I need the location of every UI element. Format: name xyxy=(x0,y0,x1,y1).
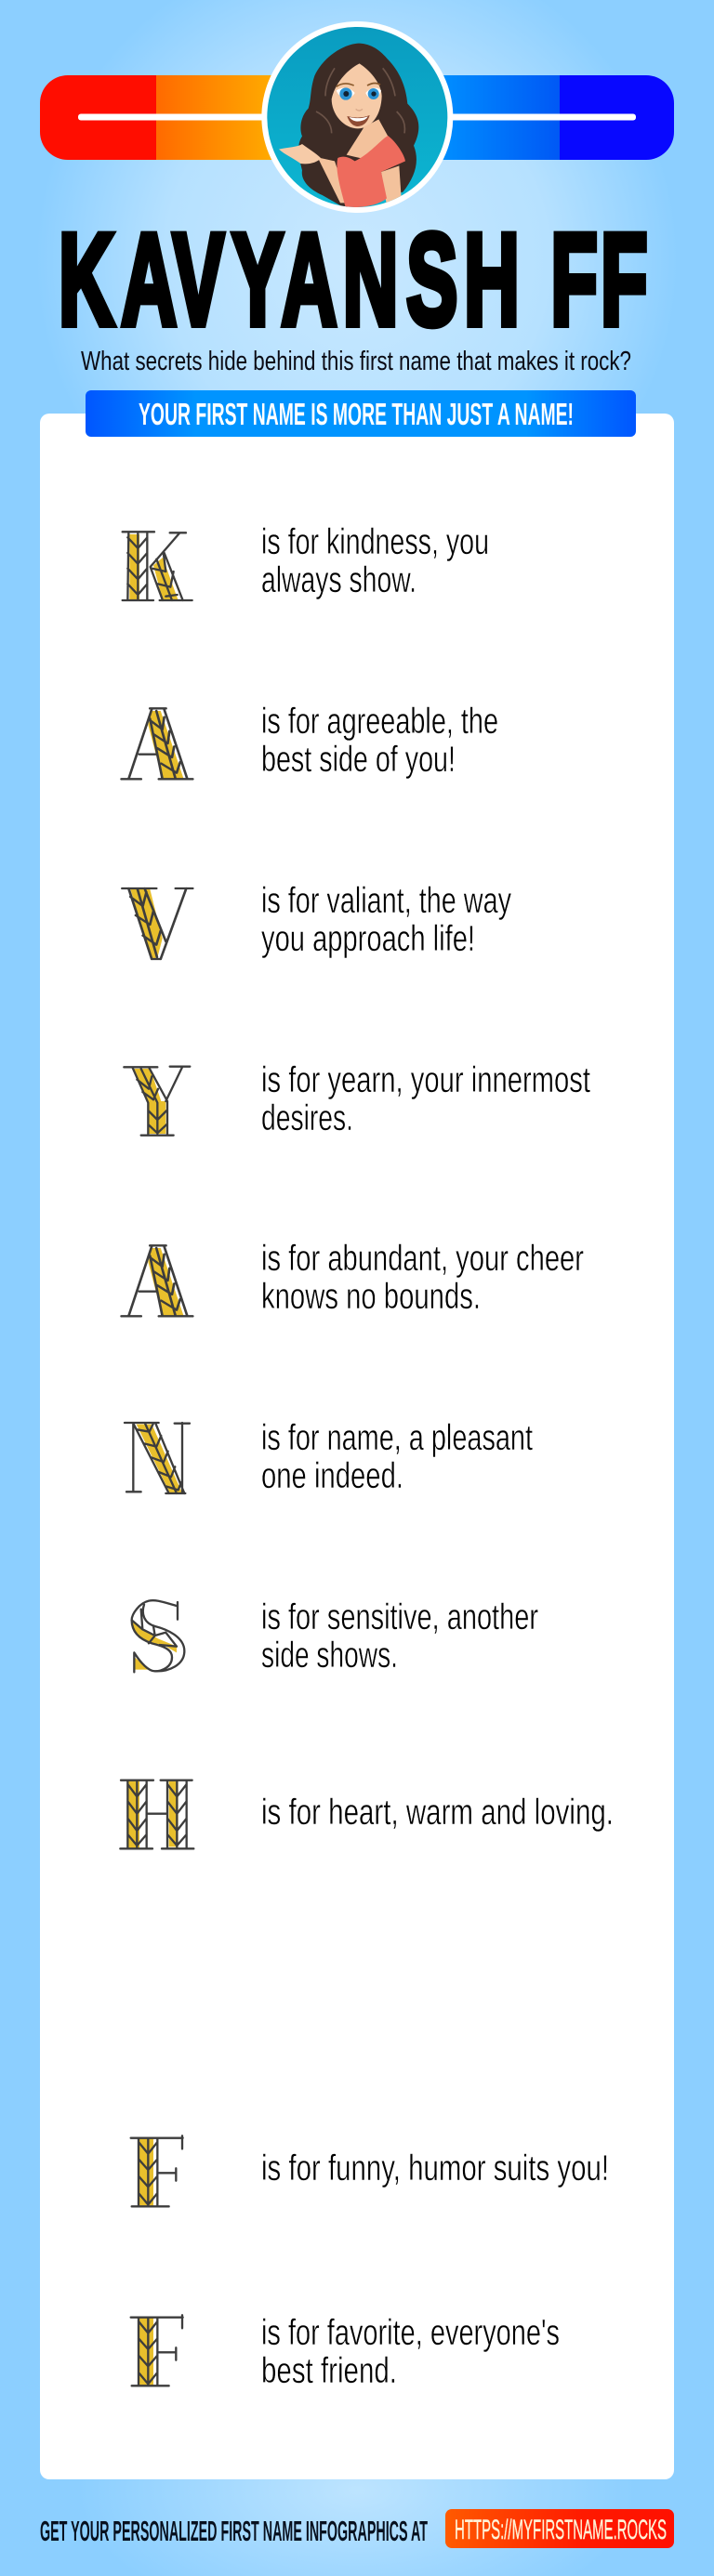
text: K line: is for kindness, you xyxy=(261,522,489,562)
title: KAVYANSH FF xyxy=(59,208,648,352)
text: A second line: knows no bounds. xyxy=(261,1277,481,1317)
icon: wheat letter H xyxy=(120,1781,193,1848)
text: N line: is for name, a pleasant xyxy=(261,1418,533,1458)
text: V line: you approach life! xyxy=(261,919,475,959)
text: F line: is for funny, humor suits you! xyxy=(261,2149,609,2188)
text: F second line xyxy=(261,2313,560,2391)
row: Y xyxy=(124,1060,590,1138)
text: S line xyxy=(261,1597,538,1676)
icon: wheat letter V xyxy=(122,888,192,959)
text: K line: always show. xyxy=(261,560,416,600)
icon: wheat letter N xyxy=(125,1423,190,1493)
text: F second line: is for favorite, everyone's xyxy=(261,2313,560,2353)
text: A second line xyxy=(261,1239,584,1317)
row: A second xyxy=(122,1239,584,1317)
text: A second line: is for abundant, your cheer xyxy=(261,1239,584,1279)
text: A line: best side of you! xyxy=(261,740,456,780)
icon: wheat letter F xyxy=(131,2136,183,2206)
text: F second line: best friend. xyxy=(261,2351,397,2391)
text: N line: one indeed. xyxy=(261,1456,403,1496)
row: H xyxy=(120,1781,614,1848)
row: F xyxy=(131,2136,609,2206)
ribbon banner xyxy=(86,390,636,437)
row: K xyxy=(123,522,489,600)
row: N xyxy=(125,1418,533,1496)
row: F second xyxy=(131,2313,560,2391)
icon: wheat letter A xyxy=(122,708,192,779)
icon: wheat letter Y xyxy=(124,1067,190,1136)
row: V xyxy=(122,881,511,959)
white content panel xyxy=(40,414,674,2479)
header white line xyxy=(78,113,636,121)
text: Y line: desires. xyxy=(261,1098,353,1138)
row: S xyxy=(132,1597,538,1676)
footer url button xyxy=(445,2509,674,2548)
avatar: cartoon woman in circle xyxy=(261,21,453,213)
text: A line xyxy=(261,702,498,780)
header gradient bar xyxy=(40,75,674,160)
row: A xyxy=(122,702,498,780)
icon: wheat letter A xyxy=(122,1245,192,1316)
icon: wheat letter F xyxy=(131,2315,183,2385)
text: N line xyxy=(261,1418,533,1496)
icon: wheat letter S xyxy=(132,1600,184,1672)
text: S line: side shows. xyxy=(261,1636,398,1676)
text: V line xyxy=(261,881,511,959)
text: K line xyxy=(261,522,489,600)
text: Y line xyxy=(261,1060,590,1138)
icon: wheat letter K xyxy=(123,532,192,600)
text: H line: is for heart, warm and loving. xyxy=(261,1793,614,1833)
text: Y line: is for yearn, your innermost xyxy=(261,1060,590,1100)
text: A line: is for agreeable, the xyxy=(261,702,498,742)
text: V line: is for valiant, the way xyxy=(261,881,511,921)
text: S line: is for sensitive, another xyxy=(261,1597,538,1637)
